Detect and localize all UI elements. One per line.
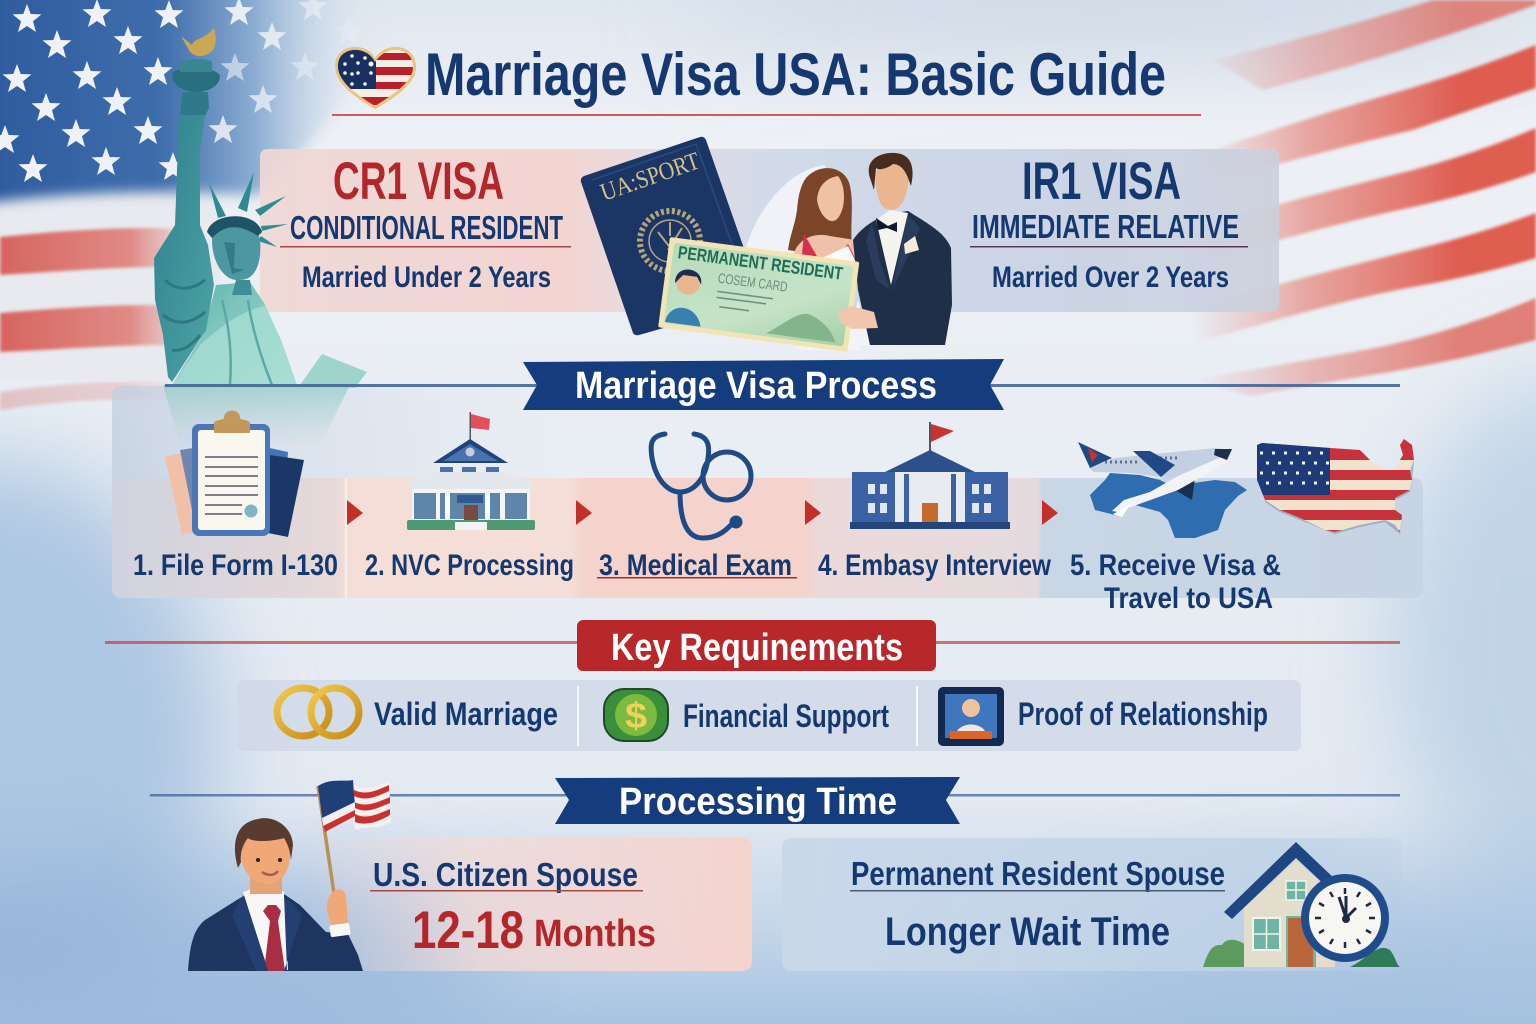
icon: US flag map — [1257, 439, 1414, 534]
flame — [181, 28, 216, 56]
CR1 heading: CR1 VISA — [333, 152, 504, 211]
label: 5. Receive Visa & — [1070, 549, 1281, 582]
title — [335, 41, 1166, 110]
requirement: proof of relationship: Proof of Relationship — [1018, 696, 1268, 732]
banner: Marriage Visa Process — [165, 359, 1400, 410]
card heading: PERMANENT RESIDENT — [677, 242, 844, 284]
step 2: NVC Processing — [365, 412, 574, 582]
arrow — [347, 500, 363, 525]
icon: airplane — [1078, 442, 1232, 517]
citizen spouse heading: U.S. Citizen Spouse — [373, 856, 638, 893]
label: 2. NVC Processing — [365, 549, 574, 582]
requirement: financial support: Financial Support — [683, 698, 889, 734]
wait time: Longer Wait Time — [885, 910, 1170, 954]
step 3: Medical Exam — [599, 434, 792, 582]
banner text: Key Requinements — [611, 627, 903, 669]
icon: relationship photo — [938, 687, 1004, 746]
label line 2: Travel to USA — [1104, 582, 1273, 615]
label: 4. Embasy Interview — [818, 549, 1052, 582]
arm and left drape — [154, 115, 214, 382]
panel: CR1 visa — [280, 152, 571, 294]
icon: globe map — [1090, 473, 1247, 538]
icon: clipboard — [165, 410, 304, 537]
step 4: Embassy Interview — [818, 422, 1052, 582]
icon: flag heart — [335, 44, 417, 110]
resident spouse heading: Permanent Resident Spouse — [851, 855, 1225, 892]
title text: Marriage Visa USA: Basic Guide — [425, 41, 1166, 108]
icon: passport — [581, 137, 762, 335]
panel: permanent resident spouse — [782, 838, 1402, 971]
CR1 subtitle: CONDITIONAL RESIDENT — [290, 209, 563, 246]
icon: permanent resident card — [658, 237, 859, 352]
icon: dollar coin — [604, 689, 668, 741]
icon: NVC building — [407, 412, 535, 530]
reflection — [163, 385, 350, 445]
flag backdrop: right stripes — [1190, 0, 1536, 396]
icon: man with flag — [188, 780, 391, 971]
banner text: Marriage Visa Process — [575, 365, 937, 407]
banner text: Processing Time — [619, 781, 897, 823]
time range unit: Months — [534, 913, 656, 955]
passport text: UA:SPORT — [597, 148, 703, 207]
torch — [172, 68, 220, 92]
IR1 heading: IR1 VISA — [1022, 152, 1181, 211]
icon: wedding rings — [277, 688, 359, 736]
CR1 condition: Married Under 2 Years — [302, 261, 551, 294]
IR1 condition: Married Over 2 Years — [992, 261, 1229, 294]
panel: process background — [112, 386, 1423, 598]
process steps — [133, 410, 1420, 615]
step 1: File Form I-130 — [133, 410, 338, 582]
IR1 subtitle: IMMEDIATE RELATIVE — [972, 208, 1239, 245]
panel: key requirements — [237, 680, 1301, 751]
arrow — [805, 500, 821, 525]
panel: IR1 visa — [970, 152, 1248, 294]
icon: house and clock — [1203, 842, 1400, 967]
panel: U.S. citizen spouse — [300, 838, 752, 971]
icon: statue of liberty — [154, 28, 367, 445]
tablet — [300, 354, 367, 388]
body drape — [172, 282, 297, 385]
bride — [745, 165, 870, 350]
step 5: Receive Visa and Travel — [1070, 435, 1420, 615]
flag backdrop: left canton and stripes — [0, 0, 375, 410]
crown spikes — [209, 172, 288, 247]
groom — [853, 153, 952, 345]
icon: embassy — [850, 422, 1010, 529]
body — [188, 894, 363, 971]
arrow — [576, 500, 592, 525]
label: 3. Medical Exam — [599, 549, 792, 582]
icon: married couple — [745, 153, 952, 350]
banner: Key Requirements — [105, 620, 1400, 671]
banner: Processing Time — [150, 777, 1400, 824]
time range number: 12-18 — [412, 901, 524, 960]
icon: dollar coin: $ — [625, 695, 647, 736]
panel: visa backdrop — [260, 149, 1279, 312]
icon: stethoscope — [651, 434, 751, 538]
requirement: valid marriage: Valid Marriage — [374, 696, 558, 732]
card subtext: COSEM CARD — [717, 270, 789, 295]
flag — [318, 780, 391, 900]
icon: groom hand — [838, 306, 878, 329]
head — [212, 224, 260, 280]
arrow — [1042, 500, 1058, 525]
label: 1. File Form I-130 — [133, 549, 338, 582]
